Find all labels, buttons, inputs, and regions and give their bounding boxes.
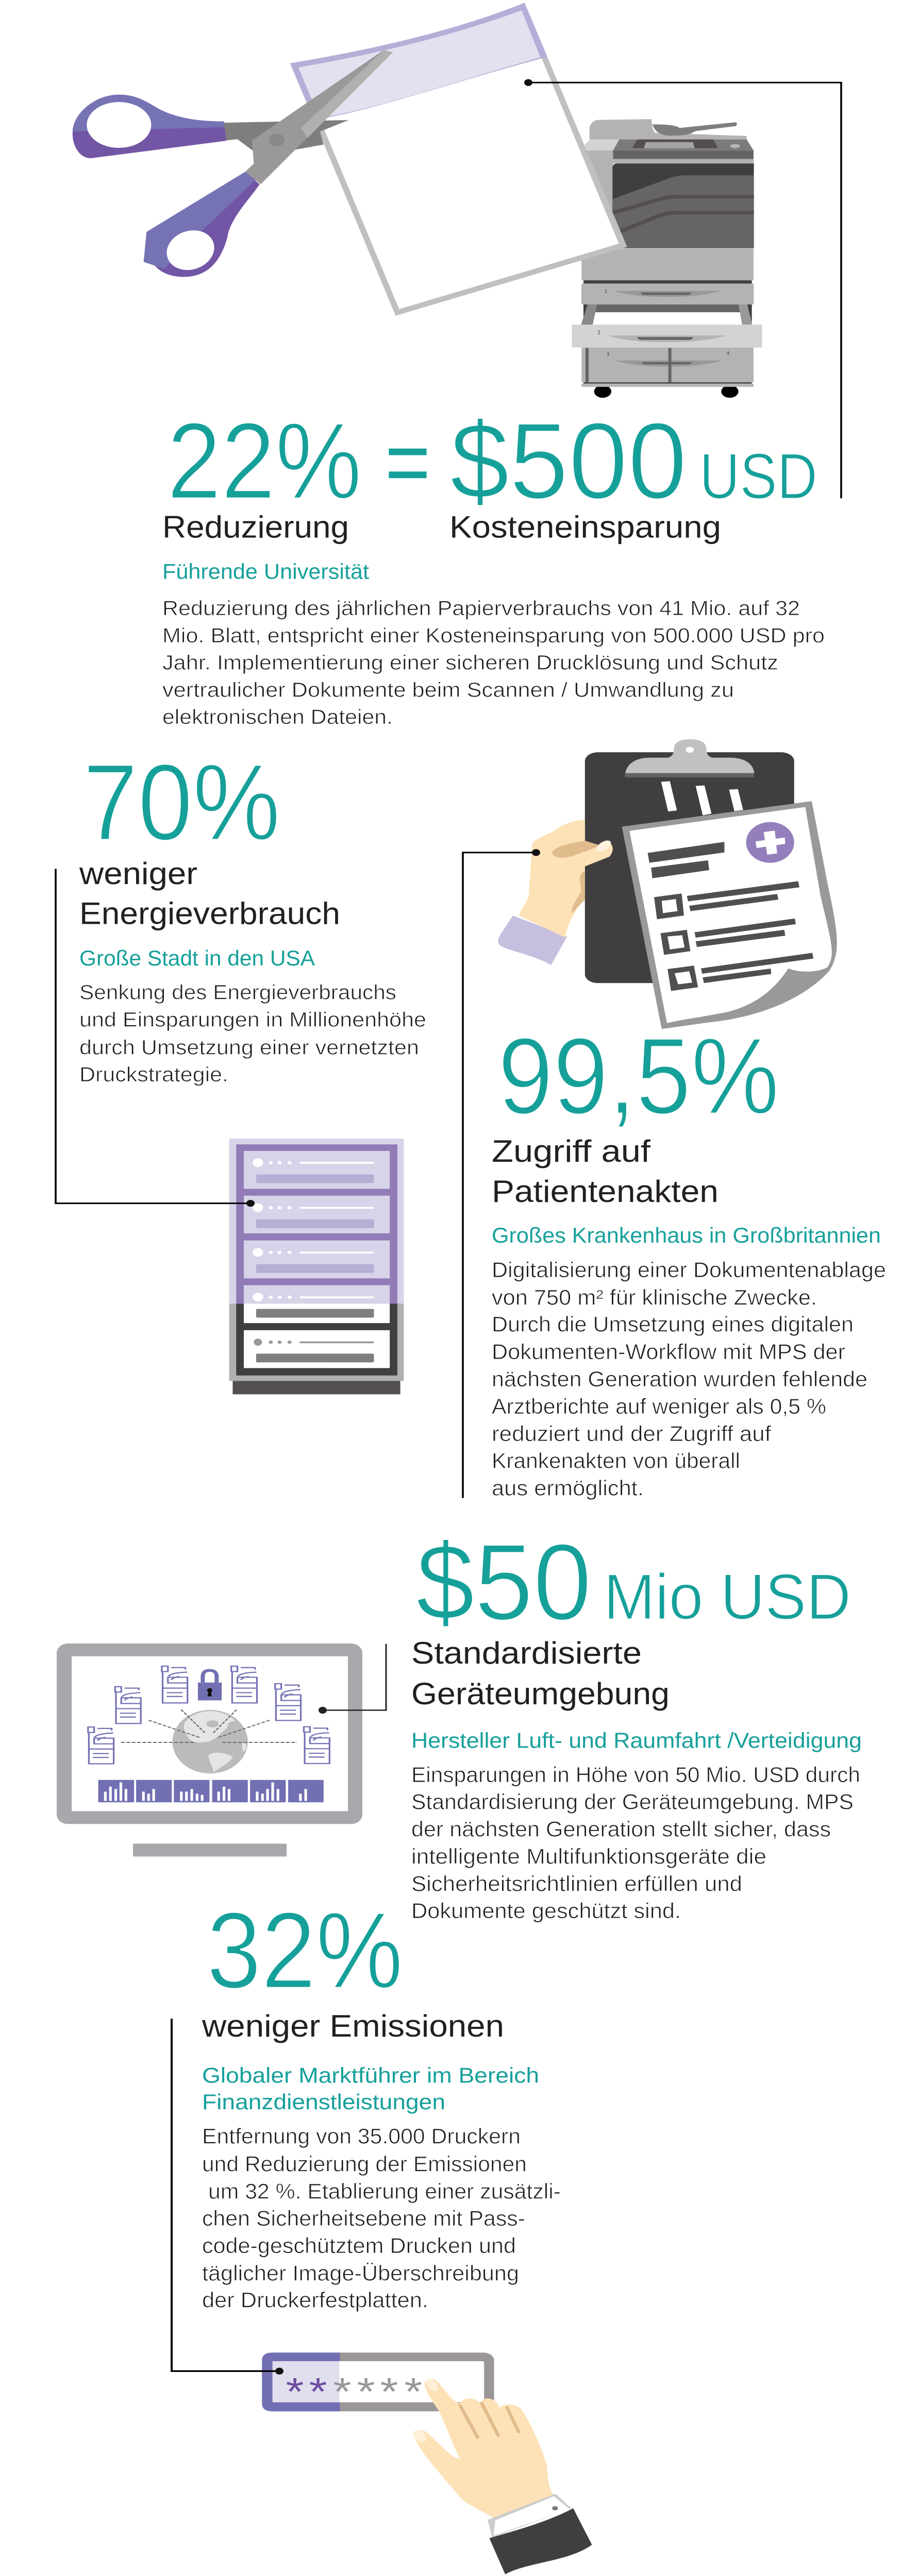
arrow: connector from text to passcode field xyxy=(172,2019,283,2375)
heading: Reduzierung und Kosteneinsparung xyxy=(162,510,721,545)
icon: pointing hand xyxy=(410,2377,592,2574)
heading: Standardisierte Geräteumgebung: Geräteumgebung xyxy=(411,1676,670,1711)
stat: 50 Mio USD xyxy=(416,1522,851,1643)
heading: weniger Emissionen: weniger Emissionen xyxy=(202,2009,504,2044)
stat: 50 Mio USD: Mio USD xyxy=(604,1561,851,1633)
arrow: connector from hand to text xyxy=(463,849,540,1498)
heading: Zugriff auf Patientenakten: Patientenakten xyxy=(492,1174,719,1209)
stat: 22 percent equals 500 USD: 22% xyxy=(167,401,362,521)
icon: clipboard with medical record held by hand xyxy=(498,739,837,1029)
stat: 22 percent equals 500 USD: USD xyxy=(699,440,817,512)
heading: weniger Energieverbrauch: weniger xyxy=(79,856,197,891)
text block: city description: durch Umsetzung einer vernetzten xyxy=(79,1036,419,1059)
text block: hospital description: Dokumenten-Workflow mit MPS der xyxy=(492,1340,845,1364)
heading: Zugriff auf Patientenakten xyxy=(492,1134,719,1209)
subheading: Hersteller Luft- und Raumfahrt /Verteidigung: Hersteller Luft- und Raumfahrt /Verteidigung xyxy=(411,1728,862,1753)
text block: financial services description: und Reduzierung der Emissionen xyxy=(202,2152,527,2176)
text block: hospital description: von 750 m² für klinische Zwecke. xyxy=(492,1285,817,1309)
icon: multifunction printer: 1 xyxy=(605,288,607,294)
stat: 50 Mio USD: $50 xyxy=(416,1522,592,1643)
panel: patient records xyxy=(463,739,886,1500)
text block: manufacturer description: der nächsten Generation stellt sicher, dass xyxy=(411,1817,831,1841)
text block: university description: Reduzierung des jährlichen Papierverbrauchs von 41 Mio. auf 32 xyxy=(162,597,800,620)
text block: university description xyxy=(162,597,825,728)
subheading: Führende Universität: Führende Universität xyxy=(162,559,369,583)
icon: passcode field: * xyxy=(309,2370,327,2413)
panel: paper cost reduction xyxy=(73,3,841,728)
heading: Standardisierte Geräteumgebung xyxy=(411,1636,670,1711)
heading: Reduzierung und Kosteneinsparung: Kosteneinsparung xyxy=(449,510,721,545)
text block: financial services description: um 32 %. Etablierung einer zusätzli- xyxy=(208,2179,561,2204)
arrow: connector from text to server rack xyxy=(56,869,255,1207)
subheading: Globaler Marktführer: Globaler Marktführer im Bereich xyxy=(202,2063,539,2088)
icon: sheet of paper xyxy=(290,3,627,316)
stat: 32 percent: 32% xyxy=(207,1890,403,2011)
stat: 70 percent: 70% xyxy=(83,742,280,863)
subheading: Globaler Marktführer: Finanzdienstleistungen xyxy=(202,2090,445,2114)
heading: Standardisierte Geräteumgebung: Standardisierte xyxy=(411,1636,642,1671)
text block: university description: vertraulicher Dokumente beim Scannen / Umwandlung zu xyxy=(162,679,734,702)
text block: financial services description xyxy=(202,2124,561,2312)
heading: weniger Energieverbrauch: Energieverbrauch xyxy=(79,896,340,931)
icon: server rack xyxy=(229,1139,404,1394)
panel: standardized device environment xyxy=(57,1522,862,1923)
icon: multifunction printer: 2 xyxy=(598,330,600,336)
panel: energy consumption xyxy=(56,742,426,1394)
panel: fewer emissions xyxy=(172,1890,592,2574)
text block: university description: elektronischen Dateien. xyxy=(162,706,393,728)
arrow: connector from monitor to text xyxy=(319,1644,386,1714)
text block: hospital description xyxy=(492,1258,886,1500)
text block: financial services description: der Druckerfestplatten. xyxy=(202,2288,428,2312)
stat: 99,5 percent: 99,5% xyxy=(498,1016,779,1137)
text block: manufacturer description: intelligente Multifunktionsgeräte die xyxy=(411,1844,766,1869)
stat: 22 percent equals 500 USD: $500 xyxy=(450,401,687,521)
text block: financial services description: code-geschütztem Drucken und xyxy=(202,2233,516,2258)
arrow: connector from paper to savings xyxy=(524,79,841,498)
text block: hospital description: reduziert und der Zugriff auf xyxy=(492,1421,771,1446)
text block: manufacturer description: Sicherheitsrichtlinien erfüllen und xyxy=(411,1872,742,1896)
icon: monitor with printers, globe and charts xyxy=(57,1643,362,1856)
icon: multifunction printer: 4 xyxy=(727,350,729,355)
text block: city description: und Einsparungen in Millionenhöhe xyxy=(79,1008,426,1031)
icon: passcode field: * xyxy=(333,2370,352,2413)
icon: passcode field: * xyxy=(357,2370,375,2413)
heading: weniger Energieverbrauch xyxy=(79,856,340,931)
text block: financial services description: täglicher Image-Überschreibung xyxy=(202,2261,519,2285)
stat: 22 percent equals 500 USD xyxy=(167,401,817,521)
heading: Reduzierung und Kosteneinsparung: Reduzierung xyxy=(162,510,349,545)
text block: hospital description: nächsten Generation wurden fehlende xyxy=(492,1367,867,1391)
text block: manufacturer description xyxy=(411,1762,860,1923)
text block: financial services description: Entfernung von 35.000 Druckern xyxy=(202,2124,521,2148)
text block: city description xyxy=(79,981,426,1086)
text block: financial services description: chen Sicherheitsebene mit Pass- xyxy=(202,2206,525,2230)
icon: passcode field xyxy=(262,2352,494,2413)
stat: 22 percent equals 500 USD: = xyxy=(385,410,430,513)
text block: manufacturer description: Standardisierung der Geräteumgebung. MPS xyxy=(411,1789,854,1814)
text block: hospital description: aus ermöglicht. xyxy=(492,1476,644,1500)
subheading: Globaler Marktführer xyxy=(202,2063,539,2114)
text block: university description: Jahr. Implementierung einer sicheren Drucklösung und Schutz xyxy=(162,651,778,674)
icon: passcode field: * xyxy=(380,2370,398,2413)
text block: city description: Druckstrategie. xyxy=(79,1063,228,1086)
text block: manufacturer description: Dokumente geschützt sind. xyxy=(411,1899,681,1923)
icon: scissors xyxy=(73,50,393,277)
text block: city description: Senkung des Energieverbrauchs xyxy=(79,981,396,1004)
text block: hospital description: Arztberichte auf weniger als 0,5 % xyxy=(492,1394,826,1418)
icon: multifunction printer: 3 xyxy=(607,351,609,357)
icon: passcode field: * xyxy=(286,2370,304,2413)
text block: hospital description: Krankenakten von überall xyxy=(492,1449,740,1473)
text block: hospital description: Durch die Umsetzung eines digitalen xyxy=(492,1312,854,1336)
subheading: Große Stadt in den USA: Große Stadt in den USA xyxy=(79,946,315,970)
icon: multifunction printer xyxy=(572,119,762,398)
heading: Zugriff auf Patientenakten: Zugriff auf xyxy=(492,1134,650,1169)
icon: passcode field: * xyxy=(404,2370,423,2413)
text block: university description: Mio. Blatt, entspricht einer Kosteneinsparung von 500.000 USD pro xyxy=(162,624,825,647)
